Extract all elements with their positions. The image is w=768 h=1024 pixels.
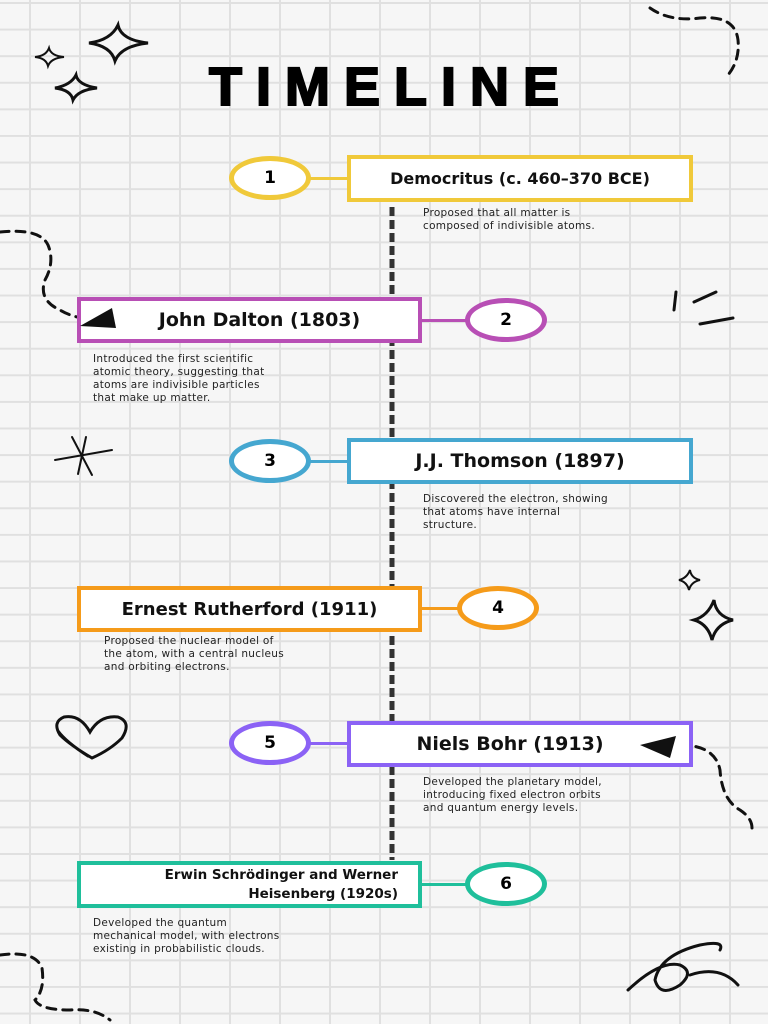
event 5 <box>229 721 693 814</box>
text: Ernest Rutherford (1911) <box>122 598 377 620</box>
text: atomic theory, suggesting that <box>93 366 264 378</box>
text: 2 <box>500 310 512 330</box>
event 3 <box>229 438 693 531</box>
text: Introduced the first scientific <box>93 353 253 365</box>
text: 3 <box>264 451 276 471</box>
text: 5 <box>264 733 276 753</box>
text: structure. <box>423 519 477 531</box>
text: J.J. Thomson (1897) <box>415 450 625 472</box>
circle 1: 1 <box>264 168 276 188</box>
icon: heart <box>57 717 126 758</box>
text: and orbiting electrons. <box>104 661 230 673</box>
text: Heisenberg (1920s) <box>248 886 398 902</box>
text: and quantum energy levels. <box>423 802 578 814</box>
icon: small sparkles right <box>679 570 700 590</box>
text: that atoms have internal <box>423 506 560 518</box>
event 4 <box>77 586 539 673</box>
text: atoms are indivisible particles <box>93 379 260 391</box>
desc 1 <box>423 207 595 232</box>
text: Proposed the nuclear model of <box>104 635 274 647</box>
text: the atom, with a central nucleus <box>104 648 284 660</box>
icon: swirl <box>628 943 738 990</box>
text: existing in probabilistic clouds. <box>93 943 265 955</box>
icon: asterisk <box>55 437 112 475</box>
text: 6 <box>500 874 512 894</box>
text: John Dalton (1803) <box>159 309 360 331</box>
desc 1: composed of indivisible atoms. <box>423 220 595 232</box>
text: Erwin Schrödinger and Werner <box>165 866 398 882</box>
event 6 <box>77 861 547 955</box>
text: 4 <box>492 598 504 618</box>
text: Discovered the electron, showing <box>423 493 608 505</box>
box 1: Democritus (c. 460–370 BCE) <box>390 169 650 188</box>
circle 1 <box>229 156 311 200</box>
text: mechanical model, with electrons <box>93 930 280 942</box>
timeline dashed line <box>390 207 394 860</box>
text: Developed the planetary model, <box>423 776 602 788</box>
desc 1: Proposed that all matter is <box>423 207 570 219</box>
text: introducing fixed electron orbits <box>423 789 601 801</box>
event 2 <box>77 297 547 404</box>
title: TIMELINE <box>209 57 573 117</box>
text: that make up matter. <box>93 392 211 404</box>
box 1 <box>347 155 693 202</box>
icon: strokes <box>674 292 733 324</box>
text: Niels Bohr (1913) <box>416 733 604 755</box>
text: Developed the quantum <box>93 917 227 929</box>
event 1 <box>229 155 693 232</box>
icon: sparkles <box>35 25 148 100</box>
